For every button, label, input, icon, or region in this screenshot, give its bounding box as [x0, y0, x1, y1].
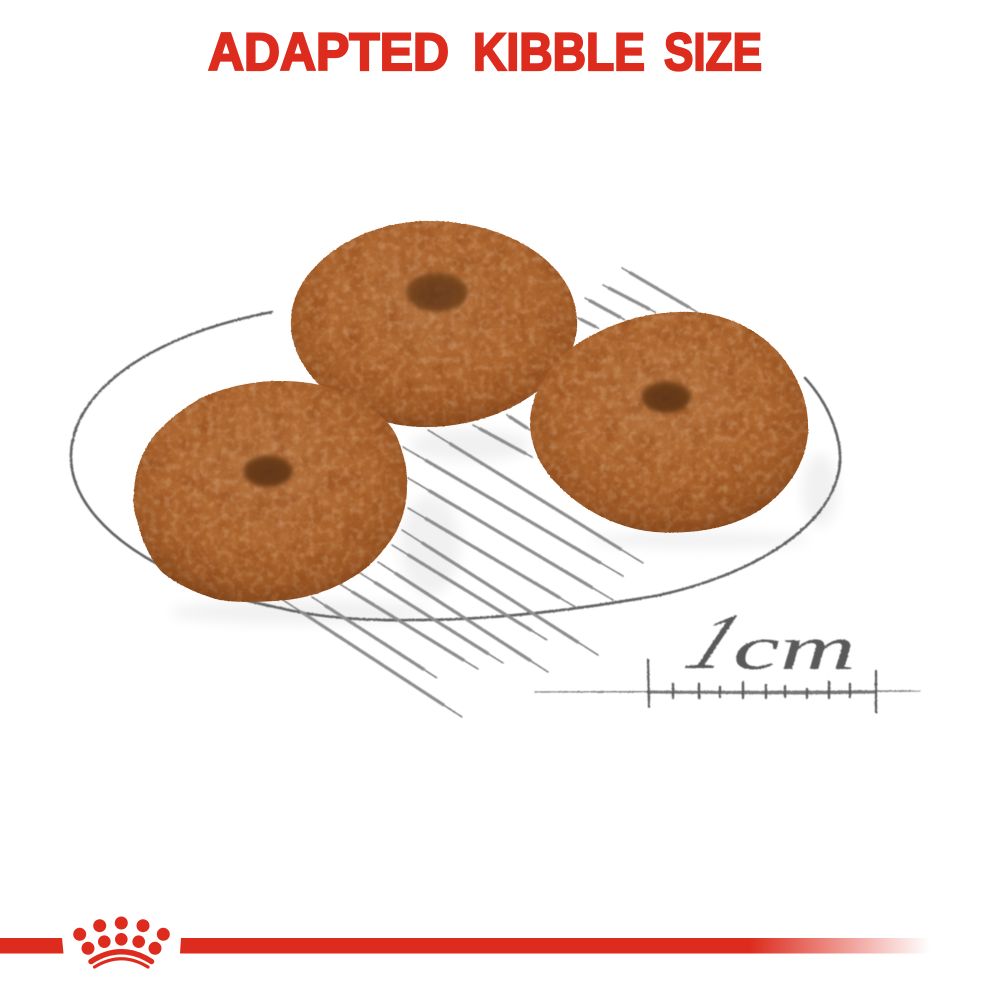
kibble: right [530, 312, 808, 532]
title: KIBBLE [473, 23, 645, 82]
hatching [283, 268, 697, 717]
plate outline [71, 312, 840, 620]
scale ruler: 1 cm [535, 598, 920, 712]
handwritten label [673, 598, 856, 686]
title: ADAPTED [208, 23, 449, 82]
kibble: left [133, 381, 407, 602]
handwritten label: cm [733, 614, 856, 683]
plate shading [170, 429, 838, 624]
illustration: pencil plate with hatching [71, 268, 840, 717]
kibble hole [641, 381, 691, 413]
title: SIZE [664, 23, 762, 82]
icon: Royal Canin crown [73, 916, 170, 967]
kibble hole [406, 272, 468, 312]
handwritten label: 1 [673, 598, 756, 686]
footer: right red bar fading out [180, 938, 930, 954]
footer: left red bar [0, 938, 64, 954]
kibble hole [243, 455, 293, 487]
ruler line and ticks [535, 660, 920, 712]
title [208, 23, 762, 82]
kibble: top centre [291, 221, 577, 427]
